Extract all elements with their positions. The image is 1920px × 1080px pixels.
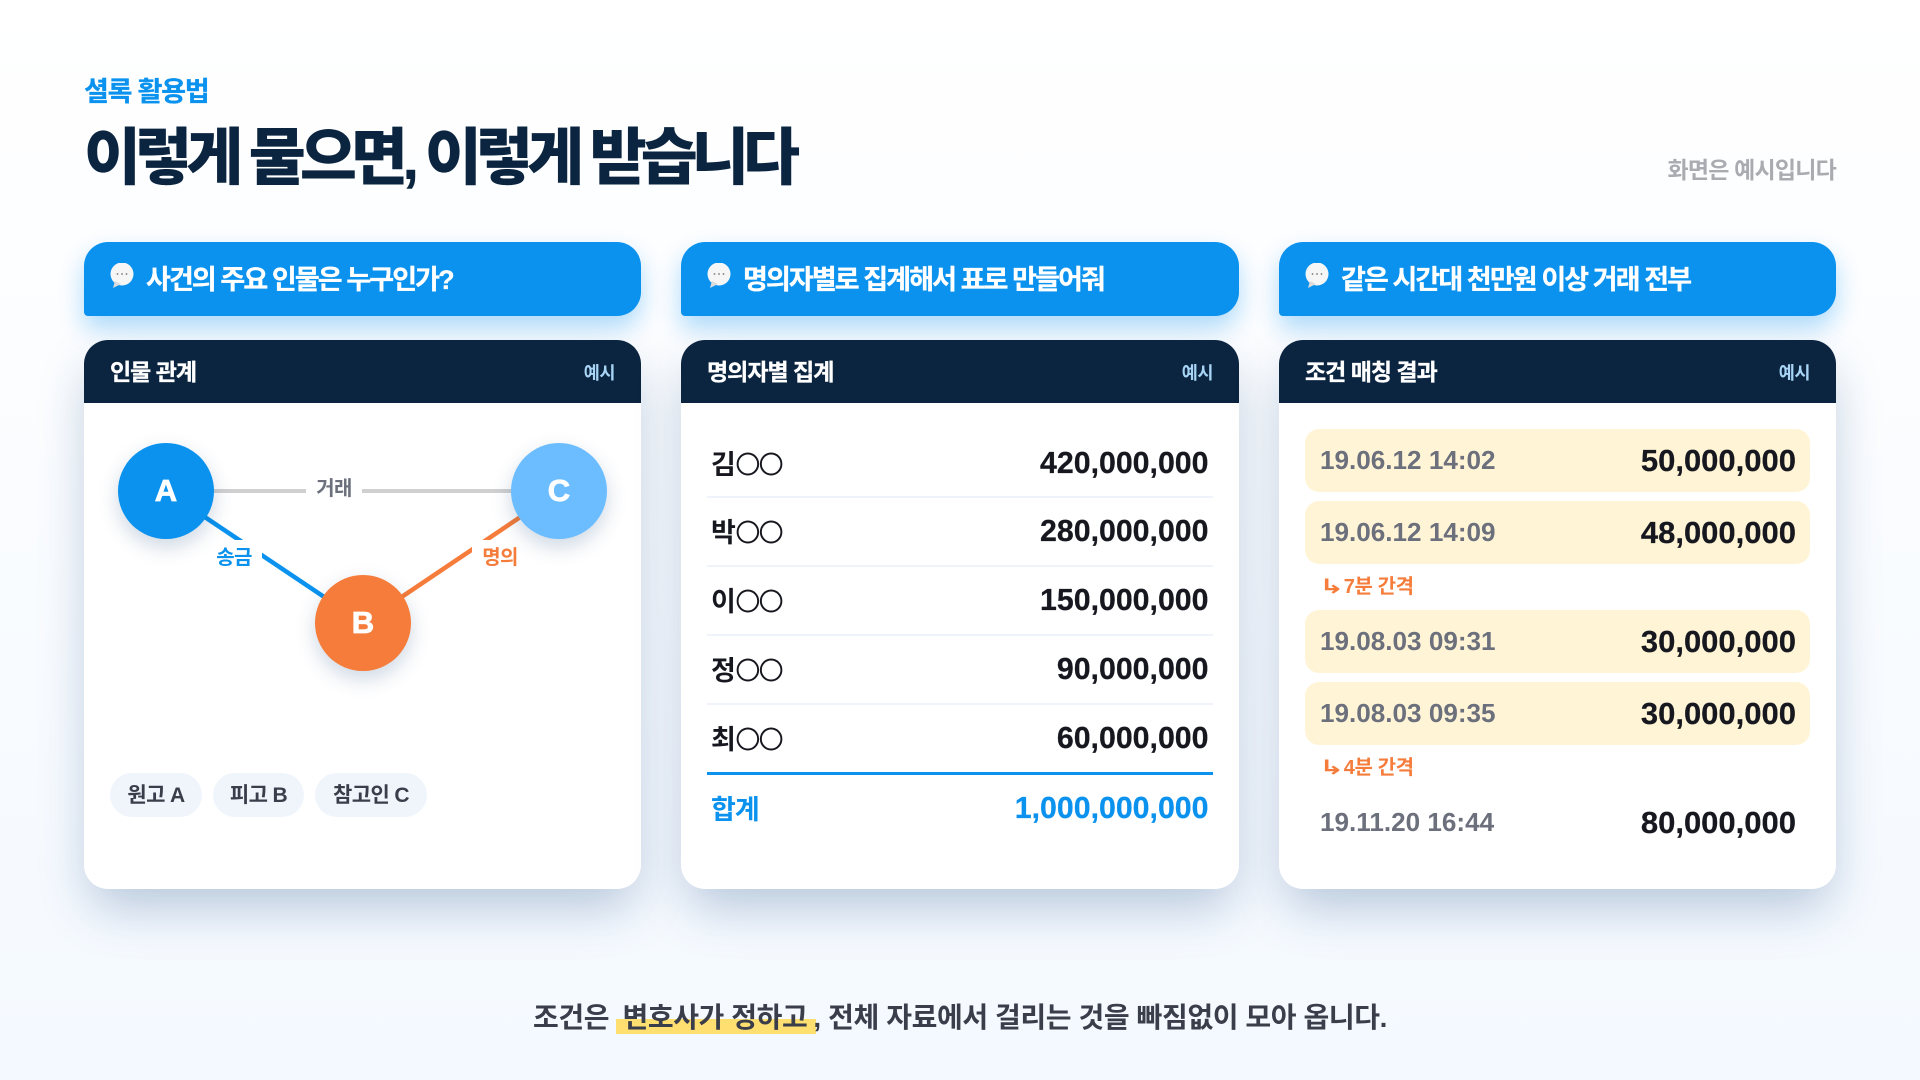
table total row — [711, 788, 1208, 827]
interval note 4분: 4분 간격 — [1344, 757, 1414, 779]
footer message: 조건은 변호사가 정하고, 전체 자료에서 걸리는 것을 빠짐없이 모아 옵니다. — [533, 1002, 1387, 1033]
edge label: 거래 — [306, 471, 362, 505]
panel header: 예시 — [584, 363, 615, 383]
panel header: 예시 — [1779, 363, 1810, 383]
chip: 원고 A — [110, 773, 202, 817]
note: 화면은 예시입니다: 화면은 예시입니다 — [1668, 157, 1836, 183]
edge label: 송금 — [206, 540, 262, 574]
match row 4: 30,000,000 — [1641, 696, 1796, 731]
panel header: 예시 — [1182, 363, 1213, 383]
question text: 같은 시간대 천만원 이상 거래 전부 — [1341, 265, 1690, 295]
icon: speech balloon — [110, 263, 134, 288]
match row 4 — [1305, 682, 1810, 745]
question pill: table — [681, 242, 1239, 316]
table row 박: 박○○ — [711, 511, 782, 550]
node C — [511, 443, 607, 539]
match row 1: 50,000,000 — [1641, 443, 1796, 478]
table total row: 1,000,000,000 — [1015, 792, 1208, 825]
match row 3 — [1305, 610, 1810, 673]
table row 김: 김○○ — [711, 443, 782, 482]
eyebrow: 셜록 활용법: 셜록 활용법 — [84, 77, 209, 107]
question text: 명의자별로 집계해서 표로 만들어줘 — [743, 265, 1104, 295]
chip: 참고인 C — [315, 773, 427, 817]
interval note 4분 — [1319, 755, 1414, 779]
match row 3: 30,000,000 — [1641, 624, 1796, 659]
node B: B — [352, 605, 374, 640]
panel header: 조건 매칭 결과 — [1305, 359, 1437, 385]
match row 5: 80,000,000 — [1641, 805, 1796, 840]
table row 김: 420,000,000 — [1040, 447, 1208, 480]
match row 1 — [1305, 429, 1810, 492]
icon: speech balloon — [1306, 263, 1328, 288]
interval note 7분: 7분 간격 — [1344, 576, 1414, 598]
table row 정: 정○○ — [711, 649, 782, 688]
table row 최: 60,000,000 — [1057, 722, 1208, 755]
edge label: 거래: 거래 — [316, 478, 352, 500]
panel: 명의자별 집계 — [681, 340, 1239, 889]
table row 정 — [711, 649, 1208, 688]
match row 2 — [1305, 501, 1810, 564]
node C: C — [548, 473, 570, 508]
table row 이: 150,000,000 — [1040, 584, 1208, 617]
panel: 인물 관계 — [84, 340, 641, 889]
panel header — [681, 340, 1239, 403]
panel header: 명의자별 집계 — [707, 359, 833, 385]
match row 1: 19.06.12 14:02 — [1320, 445, 1496, 475]
chip: 원고 A: 원고 A — [127, 784, 185, 807]
node A — [118, 443, 214, 539]
match row 3: 19.08.03 09:31 — [1320, 626, 1496, 656]
table row 박: 280,000,000 — [1040, 515, 1208, 548]
interval note 7분: ↳ — [1319, 574, 1344, 598]
chip: 피고 B: 피고 B — [230, 784, 287, 807]
icon: speech balloon — [708, 263, 730, 288]
match row 5 — [1320, 805, 1796, 840]
match row 4: 19.08.03 09:35 — [1320, 698, 1496, 728]
title: 이렇게 물으면, 이렇게 받습니다 — [84, 124, 794, 193]
panel header — [84, 340, 641, 403]
match row 2: 48,000,000 — [1641, 515, 1796, 550]
edge label: 명의: 명의 — [482, 547, 518, 569]
chip: 피고 B — [213, 773, 304, 817]
table row 최: 최○○ — [711, 718, 782, 757]
edge label: 명의 — [472, 540, 528, 574]
table row 김 — [711, 443, 1208, 482]
match row 2: 19.06.12 14:09 — [1320, 517, 1496, 547]
panel header — [1279, 340, 1836, 403]
footer highlight — [616, 1019, 816, 1034]
table row 박 — [711, 511, 1208, 550]
question text: 사건의 주요 인물은 누구인가? — [146, 265, 453, 295]
table total row: 합계 — [711, 788, 759, 827]
match row 5: 19.11.20 16:44 — [1320, 807, 1494, 837]
interval note 4분: ↳ — [1319, 755, 1344, 779]
table row 정: 90,000,000 — [1057, 653, 1208, 686]
table row 이: 이○○ — [711, 580, 782, 619]
question pill: people — [84, 242, 641, 316]
table row 이 — [711, 580, 1208, 619]
node B — [315, 575, 411, 671]
chip: 참고인 C: 참고인 C — [333, 784, 409, 807]
question pill: matching — [1279, 242, 1836, 316]
interval note 7분 — [1319, 574, 1414, 598]
panel header: 인물 관계 — [110, 359, 196, 385]
table row 최 — [711, 718, 1208, 757]
edge label: 송금: 송금 — [216, 547, 252, 569]
panel: 조건 매칭 결과 — [1279, 340, 1836, 889]
node A: A — [155, 473, 177, 508]
relationship lines — [204, 489, 520, 598]
